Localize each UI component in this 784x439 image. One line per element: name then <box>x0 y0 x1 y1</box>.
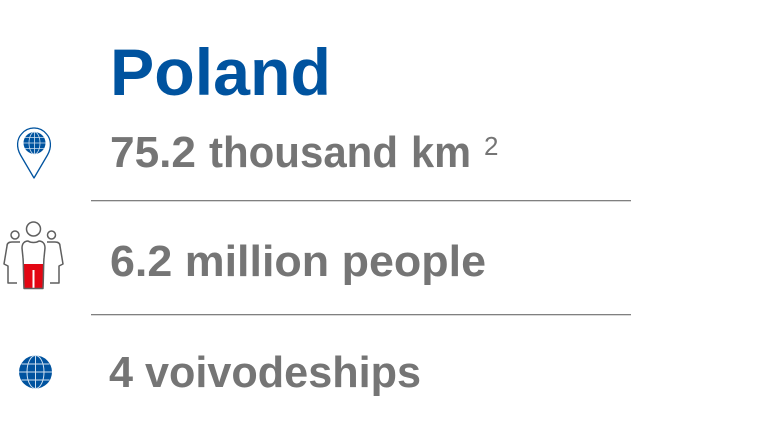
text: population: 6.2 million people <box>110 237 486 286</box>
divider <box>91 200 631 201</box>
icon: people with red legs <box>4 222 63 288</box>
icon: globe <box>19 356 52 388</box>
title: Poland <box>110 35 331 109</box>
text: area <box>110 128 471 177</box>
text: area: 75.2 <box>110 128 196 177</box>
superscript 2: 2 <box>484 131 498 161</box>
text: area: thousand <box>209 128 398 177</box>
divider <box>91 314 631 315</box>
text: voivodeships: 4 voivodeships <box>109 348 421 397</box>
text: area: km <box>411 128 471 177</box>
icon: map pin with globe <box>18 128 50 178</box>
